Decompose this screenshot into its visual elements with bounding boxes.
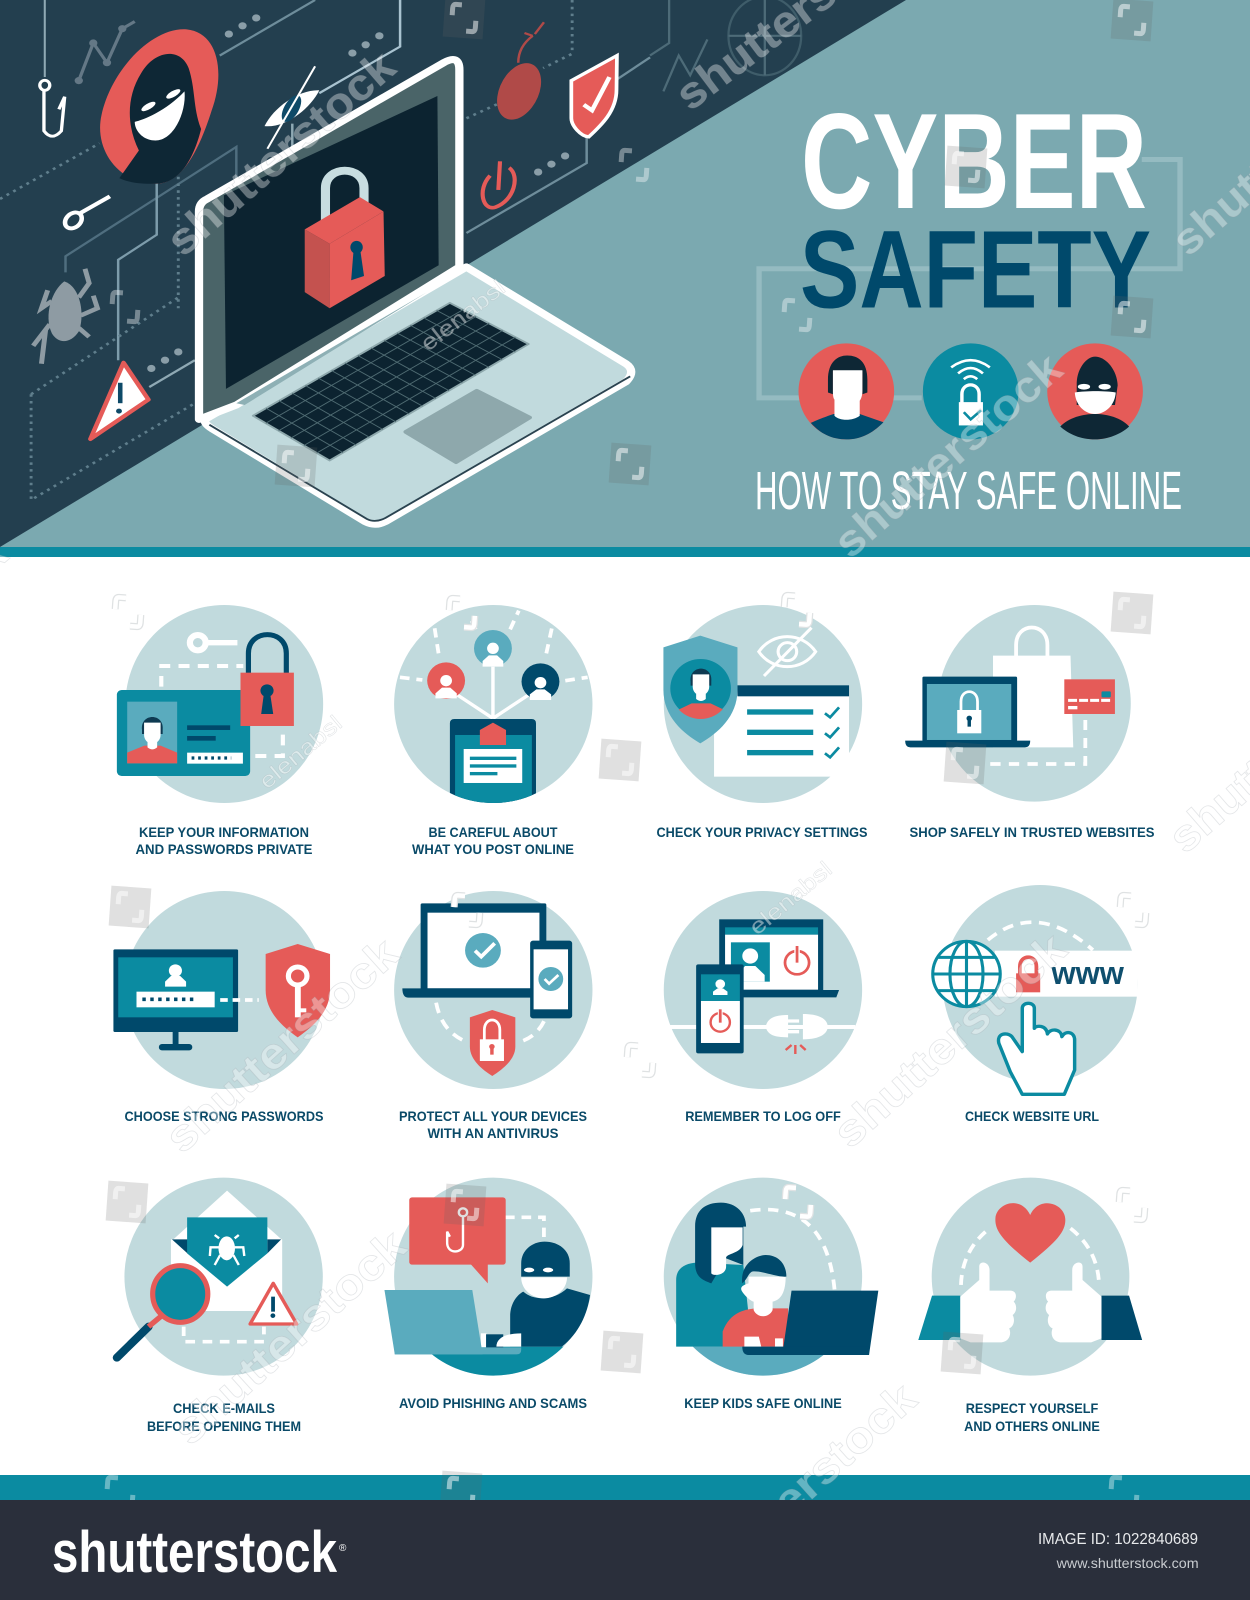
watermark overlay: shutterstock <box>156 928 408 1162</box>
faint background frames <box>759 159 1180 398</box>
icon: key <box>62 196 110 231</box>
icon: shield and settings window <box>663 605 862 803</box>
icon: bomb <box>489 22 549 125</box>
three-dot groups <box>147 14 569 372</box>
icon: id card and lock <box>117 605 323 803</box>
caption: REMEMBER TO LOG OFF <box>685 1108 841 1124</box>
icon: globe, url and pointer <box>933 885 1138 1094</box>
panel: tip 1 passwords private <box>117 605 323 857</box>
panel: tip 8 website URL <box>933 885 1138 1124</box>
caption: BEFORE OPENING THEM <box>147 1418 301 1434</box>
caption: KEEP YOUR INFORMATION <box>139 824 309 840</box>
watermark overlay: shutterstock <box>164 1220 416 1454</box>
bottom teal band <box>0 1475 1250 1500</box>
icon: post shared to people <box>394 605 592 810</box>
footer logo: shutterstock <box>52 1520 338 1585</box>
icon: parent and child at laptop <box>661 1178 878 1380</box>
caption: AND PASSWORDS PRIVATE <box>136 841 312 857</box>
icon: graph <box>75 22 135 84</box>
laptop screen <box>199 60 459 419</box>
keyboard <box>253 303 529 461</box>
panel: tip 5 strong passwords <box>113 891 330 1124</box>
panel: tip 6 antivirus <box>394 891 592 1141</box>
padlock on screen <box>305 171 385 308</box>
icon: bug <box>33 269 97 364</box>
avatar: wifi lock <box>923 343 1019 439</box>
caption <box>147 1400 301 1434</box>
dark diagonal wall <box>0 0 906 547</box>
icon: devices and plug <box>664 891 862 1089</box>
panel: tip 11 kids safe <box>661 1178 878 1411</box>
title: SAFETY: SAFETY <box>800 208 1151 332</box>
panel: tip 4 shop safely <box>905 605 1154 840</box>
hero panel background <box>0 0 1250 547</box>
hero illustration <box>0 0 650 524</box>
caption: CHECK E-MAILS <box>173 1400 275 1416</box>
watermark overlay: elenabsl <box>416 275 510 356</box>
icon: hacker with laptop and hook <box>384 1178 600 1380</box>
caption: SHOP SAFELY IN TRUSTED WEBSITES <box>910 824 1154 840</box>
caption <box>412 824 574 857</box>
caption: AND OTHERS ONLINE <box>964 1418 1100 1434</box>
footer url: www.shutterstock.com <box>1056 1555 1199 1571</box>
avatar: hacker <box>1047 343 1143 439</box>
panel: tip 2 careful posting <box>394 605 592 857</box>
circuit lines <box>0 0 650 500</box>
caption: KEEP KIDS SAFE ONLINE <box>684 1395 842 1411</box>
top wall corner details <box>650 0 801 91</box>
hero bottom band <box>0 547 1250 557</box>
watermark overlay: shutterstock <box>824 923 1076 1157</box>
caption: CHOOSE STRONG PASSWORDS <box>124 1108 324 1124</box>
touchpad <box>405 391 530 462</box>
icon: laptop, bag and credit card <box>905 605 1131 802</box>
footer bar <box>0 1500 1250 1600</box>
footer logo: ® <box>339 1543 347 1554</box>
icon: envelope, magnifier and warning <box>117 1178 323 1376</box>
caption: PROTECT ALL YOUR DEVICES <box>399 1108 587 1124</box>
caption: WHAT YOU POST ONLINE <box>412 841 574 857</box>
panel: tip 9 check emails <box>117 1178 323 1434</box>
watermark overlay: elenabsl <box>744 856 837 940</box>
watermark overlay: elenabsl <box>254 710 347 794</box>
icon: warning triangle <box>90 363 148 439</box>
icon: hacker portrait <box>100 29 218 184</box>
icon: globe, url and pointer: www <box>1051 955 1124 992</box>
panel: tip 12 respect <box>918 1178 1142 1434</box>
caption: CHECK YOUR PRIVACY SETTINGS <box>656 824 868 840</box>
icon: fishing hook <box>40 80 65 136</box>
caption: BE CAREFUL ABOUT <box>428 824 558 840</box>
watermark overlay: shutterstock <box>824 343 1072 568</box>
caption: RESPECT YOURSELF <box>966 1400 1099 1416</box>
panel: tip 3 privacy settings <box>656 605 868 840</box>
panel: tip 10 phishing <box>384 1178 600 1411</box>
icon: thumbs up and heart <box>918 1178 1142 1376</box>
icon: protected devices <box>394 891 592 1089</box>
footer image id: IMAGE ID: 1022840689 <box>1038 1531 1198 1548</box>
caption: WITH AN ANTIVIRUS <box>428 1125 558 1141</box>
caption <box>399 1108 587 1141</box>
icon: power symbol <box>483 161 515 208</box>
icon: crossed eye <box>265 66 319 149</box>
caption <box>964 1400 1100 1434</box>
icon: monitor and key shield <box>113 891 330 1089</box>
hero title area <box>650 0 1180 439</box>
caption: AVOID PHISHING AND SCAMS <box>399 1395 587 1411</box>
icon: shield with check <box>571 56 617 137</box>
laptop <box>199 60 631 524</box>
laptop base <box>205 267 631 524</box>
watermark overlay: shutterstock <box>157 41 405 266</box>
avatar: man <box>798 343 894 439</box>
panel: tip 7 log off <box>664 891 862 1124</box>
caption: CHECK WEBSITE URL <box>965 1108 1099 1124</box>
caption <box>136 824 312 857</box>
